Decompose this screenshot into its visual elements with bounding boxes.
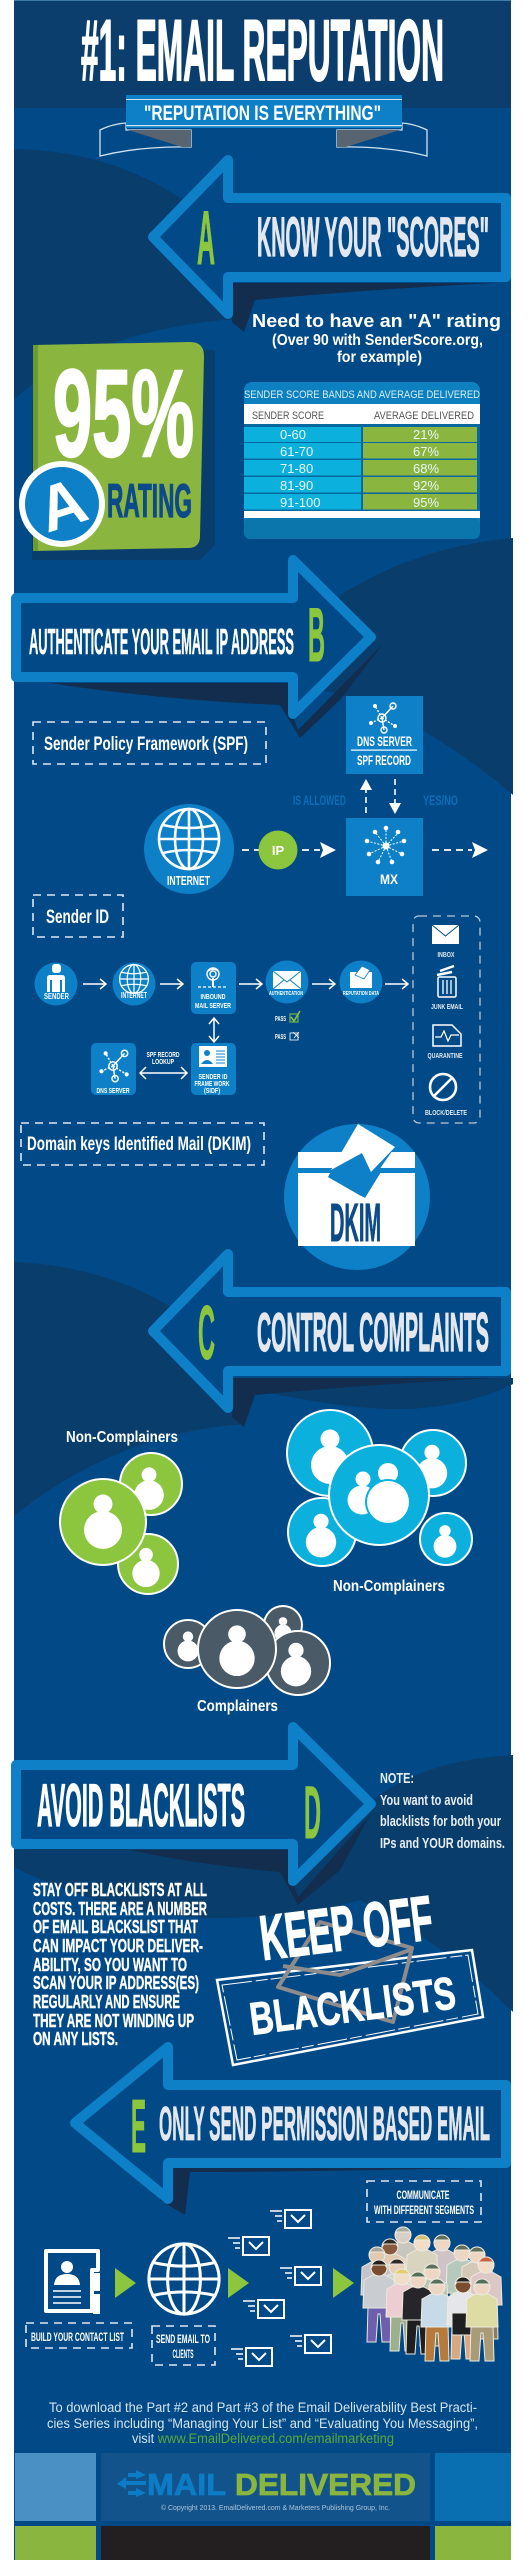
icon: contact list [46,2251,100,2314]
icon: internet globe: INTERNET [167,873,210,888]
SPF lookup label: LOOKUP [152,1057,174,1066]
label: communicate segments [367,2181,481,2222]
footer logo: © Copyright 2013. EmailDelivered.com & Marketers Publishing Group, Inc. [161,2504,390,2512]
arrow D: avoid blacklists: D [304,1771,321,1854]
table: sender score bands: 92% [413,478,439,493]
label: complainers: Complainers [197,1698,278,1715]
arrows: DNS to MX: IS ALLOWED [293,792,346,808]
arrow A: know your scores: A [197,196,215,281]
paragraph: stay off blacklists: SCAN YOUR IP ADDRESS(ES) [33,1972,199,1993]
authentication node [266,960,308,1004]
label: SPF [33,722,266,764]
paragraph: stay off blacklists: ABILITY, SO YOU WANT TO [33,1954,187,1975]
label: build your contact list: BUILD YOUR CONTACT LIST [31,2330,124,2344]
note text: NOTE: [380,1770,414,1787]
stamp: keep off blacklists [217,1883,483,2065]
inbound mail server node: INBOUND [200,992,226,1001]
icon: inbox: INBOX [438,950,454,959]
sender node [34,962,78,1006]
label: non-complainers cyan: Non-Complainers [333,1578,445,1595]
text: download call to action: visit www.EmailDelivered.com/emailmarketing [132,2431,394,2446]
inbound mail server node [191,962,236,1014]
label: non-complainers green: Non-Complainers [66,1429,178,1446]
table: sender score bands: AVERAGE DELIVERED [374,410,474,422]
A badge: A [29,464,95,546]
table: sender score bands: SENDER SCORE BANDS AND AVERAGE DELIVERED [244,389,480,401]
background swoosh C [14,1262,245,1516]
sender ID framework box: SENDER ID [198,1074,228,1081]
ribbon: subtitle: "REPUTATION IS EVERYTHING" [144,102,381,125]
paragraph: stay off blacklists: STAY OFF BLACKLISTS AT ALL [33,1879,207,1900]
label: sender ID: Sender ID [46,907,109,928]
arrows: DNS to MX: YES/NO [423,792,458,808]
cluster: cyan people [287,1410,472,1566]
paragraph: stay off blacklists: THEY ARE NOT WINDING UP [33,2010,194,2031]
rating card: RATING [107,474,192,527]
arrow E: permission based email [75,2047,506,2199]
text: need an A rating: (Over 90 with SenderScore.org, [272,332,483,349]
MX box [346,818,423,896]
footer logo [117,2467,416,2512]
reputation data node: REPUTATION DATA [343,991,379,997]
SPF lookup label [146,1050,180,1066]
table: sender score bands: 91-100 [280,495,320,510]
sender ID framework box: (SIDF) [204,1088,220,1095]
paragraph: stay off blacklists: ON ANY LISTS. [33,2028,118,2049]
icon: internet globe [144,804,234,894]
arrow shadow D [130,1815,370,1905]
icon: DKIM envelope: DKIM [330,1193,381,1253]
footer blocks [15,2453,511,2560]
text: need an A rating: Need to have an "A" rating [252,311,501,331]
table: sender score bands: 71-80 [280,461,313,476]
pass marks: PASS [275,1016,286,1023]
icon: block: BLOCK/DELETE [425,1108,467,1117]
icon: junk email: JUNK EMAIL [431,1002,463,1011]
background swoosh A [14,149,250,400]
DNS server box [346,696,423,774]
panel: delivery outcomes [413,916,480,1123]
arrow E: permission based email: E [131,2084,146,2168]
DNS server small box: DNS SERVER [96,1086,130,1095]
paragraph: stay off blacklists: OF EMAIL BLACKSLIST THAT [33,1916,198,1937]
table: sender score bands: 0-60 [280,427,306,442]
text: need an A rating: for example) [337,349,422,366]
authentication node: AUTHENTICATION [269,991,303,997]
label: communicate segments: COMMUNICATE [396,2188,450,2202]
paragraph: stay off blacklists: CAN IMPACT YOUR DELIVER- [33,1935,203,1956]
reputation data node [340,960,382,1004]
arrow: internet to MX with IP: IP [272,843,284,858]
background swoosh B [320,538,513,795]
table: sender score bands: 67% [413,444,439,459]
illustration: crowd [361,2227,502,2361]
DNS server box: DNS SERVER [357,733,412,749]
label: send email to clients: CLIENTS [172,2347,194,2361]
arrow C: control complaints: C [198,1291,215,1376]
icon: quarantine: QUARANTINE [428,1051,462,1060]
95 percent: 95% [53,346,194,483]
SPF lookup label: SPF RECORD [146,1050,180,1059]
icon: inbox [432,925,459,959]
icon: DKIM envelope [284,1123,430,1270]
label: send email to clients [152,2326,215,2365]
ribbon: subtitle [100,95,427,156]
cluster: green people [60,1453,182,1594]
table: sender score bands: 95% [413,495,439,510]
internet node [112,962,156,1006]
icons: flying envelopes [228,2210,331,2366]
pass marks [275,1011,300,1041]
arrow: MX out [432,842,488,858]
table: sender score bands: 81-90 [280,478,313,493]
cluster: grey people [164,1606,330,1695]
table: sender score bands [244,382,480,539]
label: DKIM: Domain keys Identified Mail (DKIM) [27,1134,251,1155]
arrow B: authenticate [16,560,371,714]
table: sender score bands: SENDER SCORE [252,410,324,422]
arrow A: know your scores [153,160,506,314]
table: sender score bands: 61-70 [280,444,313,459]
arrow shadow B [50,645,382,738]
label: send email to clients: SEND EMAIL TO [156,2332,210,2346]
flow: sender ID process [34,960,408,1095]
text: download call to action [47,2400,478,2446]
footer logo: DELIVERED [235,2467,416,2502]
icon: quarantine [428,1025,462,1060]
arrow shadow A [232,283,495,332]
internet node: INTERNET [121,991,147,1000]
pass marks: PASS [275,1034,286,1041]
arrow B: authenticate: B [308,593,325,678]
flow arrows [83,979,408,1079]
arrow shadow E [160,2168,470,2215]
text: download call to action: To download the Part #2 and Part #3 of the Email Deliverability Best Practi- [49,2400,477,2415]
arrow shadow C [232,1378,495,1427]
icon: junk email [431,966,463,1011]
sender node: SENDER [44,992,69,1001]
background swoosh D [14,1755,513,2012]
arrow C: control complaints [153,1254,506,1408]
label: DKIM [21,1123,264,1165]
top dark title band [14,0,511,108]
DNS server small box [91,1043,136,1095]
label: SPF: Sender Policy Framework (SPF) [44,734,248,755]
arrows: DNS to MX [293,779,458,814]
text: download call to action: cies Series including “Managing Your List” and “Evaluating You Messaging”, [47,2416,478,2431]
note text [380,1770,505,1852]
MX box: MX [380,871,399,887]
label: sender ID [33,895,123,937]
paragraph: stay off blacklists [33,1879,207,2049]
note text: You want to avoid [380,1792,473,1809]
rating card [19,342,215,560]
footer logo: MAIL [147,2467,226,2502]
icon: block [425,1074,467,1117]
DNS server box: SPF RECORD [357,752,411,768]
text: need an A rating [252,311,501,366]
sender ID framework box [191,1043,236,1095]
label: build your contact list [26,2323,132,2348]
arrows: green process [115,2268,354,2298]
paragraph: stay off blacklists: REGULARLY AND ENSURE [33,1991,180,2012]
icon: send globe [149,2244,219,2314]
table: sender score bands: 21% [413,427,439,442]
arrow: internet to MX with IP [242,830,336,870]
inbound mail server node: MAIL SERVER [195,1001,231,1010]
arrow D: avoid blacklists [16,1727,371,1881]
sender ID framework box: FRAME WORK [194,1081,230,1088]
table: sender score bands: 68% [413,461,439,476]
paragraph: stay off blacklists: COSTS. THERE ARE A NUMBER [33,1898,207,1919]
